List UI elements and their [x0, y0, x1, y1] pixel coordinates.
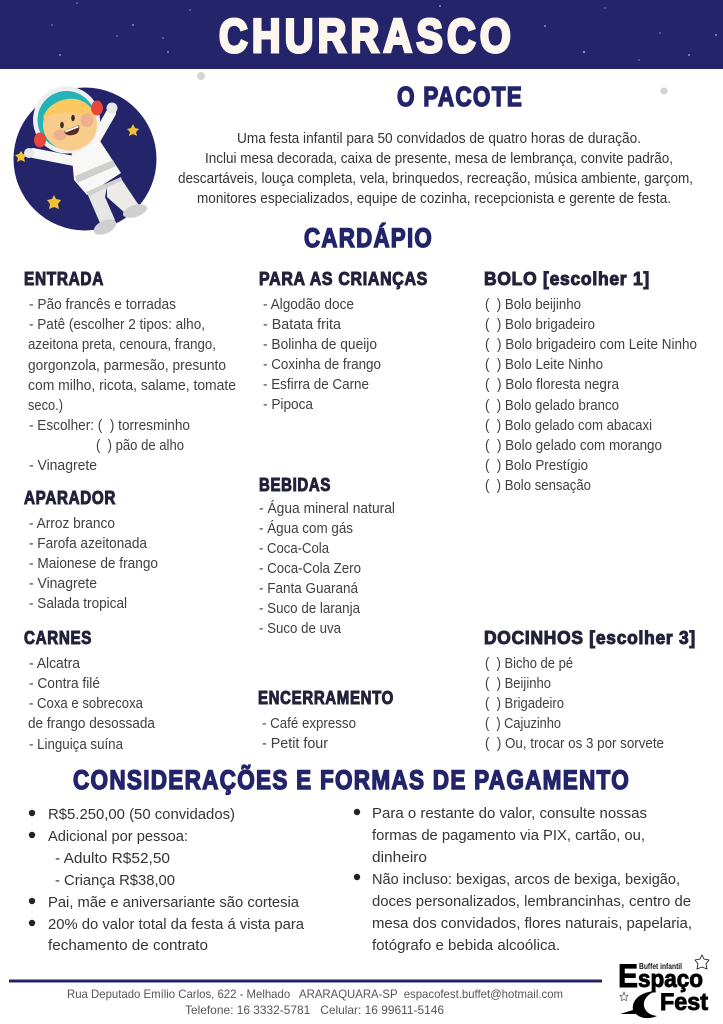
panel: entrada: - Vinagrete	[29, 458, 97, 474]
panel: aparador: - Vinagrete	[29, 576, 97, 592]
panel: docinhos: ( ) Ou, trocar os 3 por sorvete	[485, 736, 664, 752]
panel: payment right: fotógrafo e bebida alcoólica.	[372, 937, 560, 954]
panel: carnes: - Contra filé	[29, 676, 100, 692]
panel: bebidas	[259, 475, 395, 637]
panel: entrada: ENTRADA	[24, 269, 104, 289]
panel: aparador: - Farofa azeitonada	[29, 536, 148, 552]
panel: bolo: ( ) Bolo gelado com morango	[485, 438, 662, 454]
panel: docinhos: ( ) Cajuzinho	[485, 716, 561, 732]
panel: payment left: R$5.250,00 (50 convidados)	[48, 806, 235, 823]
intro text block: monitores especializados, equipe de cozinha, recepcionista e gerente de festa.	[197, 190, 671, 207]
heading: considerações: CONSIDERAÇÕES E FORMAS DE PAGAMENTO	[73, 764, 630, 795]
panel: entrada: gorgonzola, parmesão, presunto	[28, 358, 226, 374]
panel: encerramento: - Petit four	[262, 736, 328, 752]
footer contact: Telefone: 16 3332-5781 Celular: 16 99611-5146	[185, 1003, 444, 1017]
panel: bolo: ( ) Bolo Leite Ninho	[485, 357, 603, 373]
panel: bebidas: - Água mineral natural	[259, 500, 395, 517]
panel: docinhos: DOCINHOS [escolher 3]	[484, 628, 696, 648]
panel: para as crianças: - Esfirra de Carne	[263, 377, 369, 393]
logo: Espaço Fest: Espaço	[618, 958, 703, 994]
panel: entrada: seco.)	[28, 398, 63, 414]
panel: payment left: Adicional por pessoa:	[48, 828, 188, 845]
footer contact	[67, 987, 563, 1017]
panel: payment right: doces personalizados, lembrancinhas, centro de	[372, 893, 691, 910]
panel: carnes: CARNES	[24, 628, 92, 648]
panel: payment right: Para o restante do valor, consulte nossas	[372, 805, 647, 822]
astronaut illustration	[14, 86, 156, 238]
panel: docinhos: ( ) Beijinho	[485, 676, 551, 692]
logo: Espaço Fest: Fest	[660, 989, 708, 1016]
decorative dots	[197, 72, 668, 94]
arms	[33, 113, 111, 161]
body	[71, 141, 121, 195]
panel: bebidas: BEBIDAS	[259, 475, 331, 495]
panel: entrada: - Escolher: ( ) torresminho	[29, 418, 190, 434]
panel: bebidas: - Coca-Cola Zero	[259, 561, 361, 577]
panel: carnes: - Coxa e sobrecoxa	[29, 696, 144, 712]
panel: payment left	[29, 806, 305, 954]
panel: para as crianças: - Batata frita	[263, 317, 342, 333]
panel: aparador: - Maionese de frango	[29, 556, 158, 572]
panel: payment left: Pai, mãe e aniversariante são cortesia	[48, 894, 300, 911]
panel: aparador: APARADOR	[24, 488, 116, 508]
panel: aparador: - Arroz branco	[29, 516, 115, 532]
panel: bolo: ( ) Bolo brigadeiro com Leite Ninho	[485, 337, 697, 353]
panel: payment left: 20% do valor total da festa á vista para	[48, 916, 305, 933]
panel: bebidas: - Fanta Guaraná	[259, 581, 359, 597]
intro text block: Inclui mesa decorada, caixa de presente, mesa de lembrança, convite padrão,	[205, 150, 673, 167]
panel: bolo: ( ) Bolo brigadeiro	[485, 317, 595, 333]
panel: docinhos: ( ) Brigadeiro	[485, 696, 564, 712]
heading: Cardápio: CARDÁPIO	[304, 222, 433, 253]
panel: aparador: - Salada tropical	[29, 596, 127, 612]
panel: carnes: de frango desossada	[28, 716, 156, 732]
panel: para as crianças: - Bolinha de queijo	[263, 337, 377, 353]
panel: bebidas: - Água com gás	[259, 520, 353, 537]
panel: payment left: - Criança R$38,00	[55, 872, 175, 889]
panel: entrada: azeitona preta, cenoura, frango,	[28, 337, 216, 353]
panel: bolo: BOLO [escolher 1]	[484, 269, 650, 289]
panel: entrada: - Pão francês e torradas	[29, 297, 176, 313]
panel: bolo: ( ) Bolo beijinho	[485, 297, 581, 313]
panel: docinhos	[484, 628, 696, 752]
panel: carnes: - Alcatra	[29, 656, 81, 672]
footer contact: Rua Deputado Emílio Carlos, 622 - Melhado ARARAQUARA-SP espacofest.buffet@hotmail.com	[67, 987, 563, 1001]
panel: carnes	[24, 628, 156, 753]
panel: aparador	[24, 488, 158, 612]
panel: payment right: mesa dos convidados, flores naturais, papelaria,	[372, 915, 692, 932]
panel: payment right: dinheiro	[372, 849, 427, 866]
panel: bolo: ( ) Bolo gelado branco	[485, 398, 619, 414]
heading: O Pacote: O PACOTE	[397, 81, 523, 112]
panel: encerramento	[258, 688, 394, 752]
header banner	[0, 0, 723, 69]
intro text block: Uma festa infantil para 50 convidados de quatro horas de duração.	[237, 130, 641, 147]
panel: bebidas: - Coca-Cola	[259, 541, 330, 557]
logo: Espaço Fest: Buffet infantil	[639, 962, 682, 971]
panel: para as crianças: - Pipoca	[263, 397, 314, 413]
panel: entrada: ( ) pão de alho	[96, 438, 184, 454]
panel: entrada: com milho, ricota, salame, tomate	[28, 378, 236, 394]
icon: stars	[15, 124, 139, 209]
panel: docinhos: ( ) Bicho de pé	[485, 656, 573, 672]
panel: para as crianças	[259, 269, 428, 413]
intro text block	[178, 130, 693, 207]
panel: payment right: formas de pagamento via PIX, cartão, ou,	[372, 827, 645, 844]
panel: bolo: ( ) Bolo gelado com abacaxi	[485, 418, 652, 434]
helmet and face	[33, 86, 100, 154]
panel: para as crianças: - Algodão doce	[263, 297, 354, 313]
title: CHURRASCO	[219, 9, 515, 62]
panel: bolo: ( ) Bolo sensação	[485, 478, 591, 494]
panel: bolo: ( ) Bolo Prestígio	[485, 458, 588, 474]
panel: carnes: - Linguiça suína	[29, 737, 124, 753]
panel: bebidas: - Suco de uva	[259, 621, 342, 637]
panel: encerramento: ENCERRAMENTO	[258, 688, 394, 708]
logo: Espaço Fest	[618, 955, 709, 1018]
panel: para as crianças: PARA AS CRIANÇAS	[259, 269, 428, 289]
panel: payment right: Não incluso: bexigas, arcos de bexiga, bexigão,	[372, 871, 680, 888]
icon: outline stars	[695, 955, 709, 969]
panel: entrada: - Patê (escolher 2 tipos: alho,	[29, 317, 205, 333]
panel: payment right	[354, 805, 692, 954]
panel: payment left: fechamento de contrato	[48, 937, 208, 954]
icon: crescent moon	[620, 991, 657, 1018]
panel: para as crianças: - Coxinha de frango	[263, 357, 381, 373]
legs and boots	[87, 180, 149, 238]
panel: bebidas: - Suco de laranja	[259, 601, 361, 617]
panel: entrada	[24, 269, 236, 474]
panel: encerramento: - Café expresso	[262, 716, 356, 732]
panel: payment left: - Adulto R$52,50	[55, 850, 170, 867]
panel: bolo: ( ) Bolo floresta negra	[485, 377, 620, 393]
panel: bolo	[484, 269, 697, 494]
